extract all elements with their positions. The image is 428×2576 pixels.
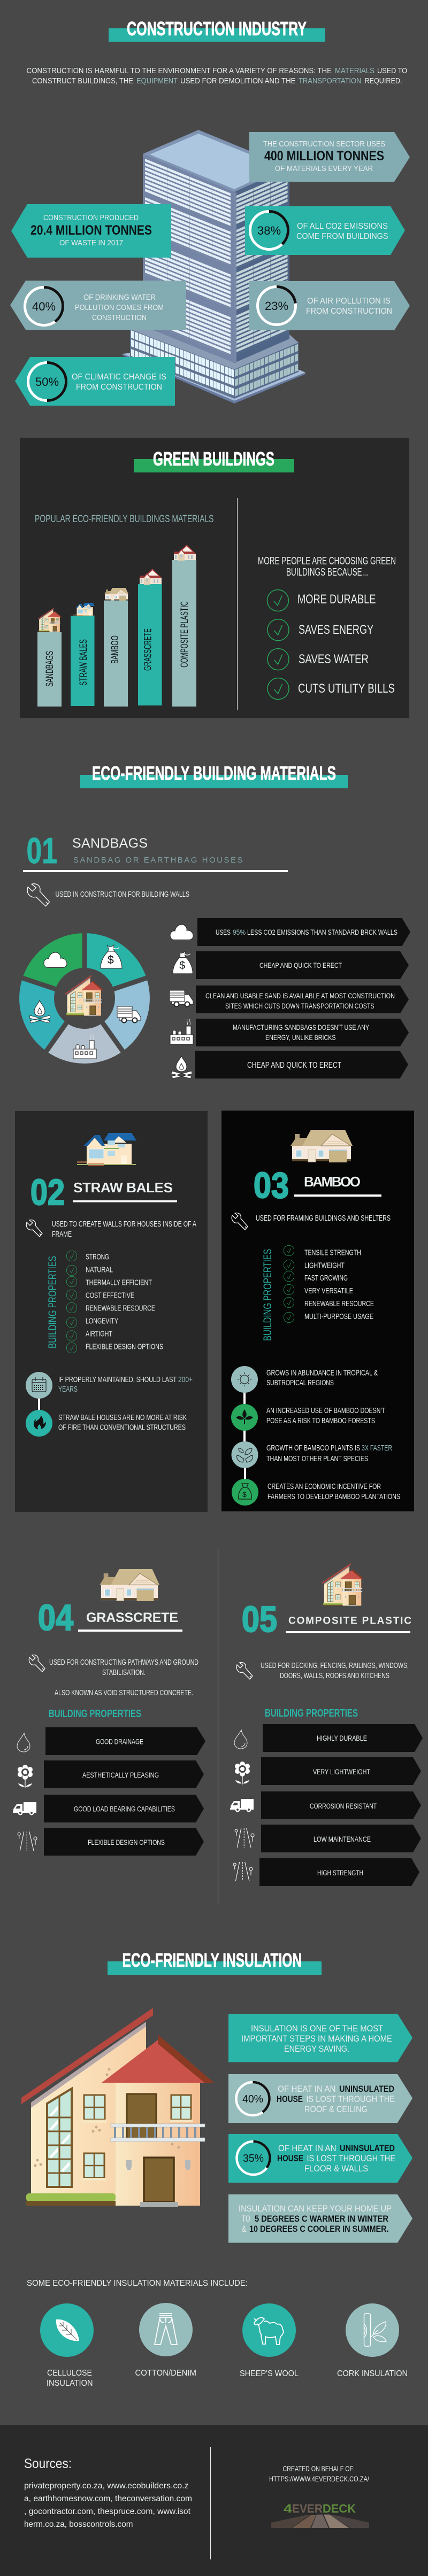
heading: sandbags: SANDBAGS: [72, 836, 148, 851]
footer panel: [0, 2425, 428, 2576]
heading: bamboo: BAMBOO: [304, 1174, 361, 1190]
intro text block: REQUIRED.: [365, 76, 402, 86]
checklist: straw bale properties: STRONG: [86, 1253, 109, 1262]
intro text block: [27, 66, 407, 86]
callout: temperature: &: [242, 2224, 247, 2234]
section 05: composite plastic: [230, 1563, 423, 1886]
bar chart: popular materials: STRAW BALES: [78, 639, 89, 686]
heading: sources: Sources:: [24, 2456, 72, 2471]
callout: temperature: 5 DEGREES C WARMER IN WINTER: [255, 2214, 388, 2224]
callout: 400 million tonnes: 400 MILLION TONNES: [264, 149, 384, 164]
fact: tropical: SUBTROPICAL REGIONS: [266, 1378, 334, 1387]
checklist: bamboo properties: VERY VERSATILE: [304, 1286, 353, 1295]
text: created on behalf of: HTTPS://WWW.4EVERDECK.CO.ZA/: [269, 2474, 369, 2483]
usage text: USED IN CONSTRUCTION FOR BUILDING WALLS: [56, 890, 189, 899]
icon: money bag: [232, 1479, 258, 1506]
intro text block: USED FOR DEMOLITION AND THE: [180, 76, 295, 86]
subheading: SANDBAG OR EARTHBAG HOUSES: [73, 856, 243, 865]
callout: 23% air pollution: OF AIR POLLUTION IS: [307, 297, 391, 306]
underline: [286, 1631, 410, 1633]
house illustration: beige: [100, 1569, 159, 1601]
fact: cheap: [196, 951, 409, 979]
icon: road: [235, 1828, 254, 1848]
title: construction industry: [109, 18, 325, 42]
callout: 23% air pollution: FROM CONSTRUCTION: [306, 307, 392, 316]
label: building properties: BUILDING PROPERTIES: [262, 1249, 274, 1341]
icon: drop: [17, 1733, 30, 1752]
property: high strength: HIGH STRENGTH: [317, 1868, 363, 1877]
fact: lifespan: YEARS: [58, 1385, 78, 1394]
label: building properties: BUILDING PROPERTIES: [47, 1256, 59, 1348]
intro text block: MATERIALS: [335, 66, 374, 75]
number 02: 02: [30, 1172, 65, 1213]
chart heading: POPULAR ECO-FRIENDLY BUILDINGS MATERIALS: [35, 514, 214, 525]
house illustration: beige: [291, 1130, 353, 1162]
text: source list: , gocontractor.com, thespruce.com, www.isot: [24, 2507, 191, 2516]
footer divider: [210, 2447, 211, 2559]
fact: quick to erect: CHEAP AND QUICK TO ERECT: [247, 1061, 341, 1070]
callout: 35% floor and walls: [228, 2134, 412, 2183]
fact: growth: GROWTH OF BAMBOO PLANTS IS: [266, 1444, 360, 1453]
property: corrosion resistant: CORROSION RESISTANT: [310, 1802, 377, 1810]
bar chart: popular materials: BAMBOO: [110, 635, 121, 664]
callout: 40% roof and ceiling: OF HEAT IN AN: [278, 2084, 336, 2094]
checklist: bamboo properties: RENEWABLE RESOURCE: [304, 1299, 374, 1308]
bar chart: popular materials: SANDBAGS: [44, 651, 56, 687]
callout: 400 million tonnes: OF MATERIALS EVERY YEAR: [275, 164, 373, 173]
usage text: [261, 1661, 409, 1680]
callout: 35% floor and walls: IS LOST THROUGH THE: [307, 2153, 395, 2163]
fact: quick to erect: [195, 1051, 408, 1078]
fact: transport: [196, 986, 409, 1013]
house illustration: blue roof: [77, 1133, 136, 1166]
panel: straw bales: [15, 1111, 208, 1512]
callout: temperature: [228, 2194, 412, 2243]
usage text: USED FOR CONSTRUCTING PATHWAYS AND GROUND: [49, 1658, 198, 1667]
fact: economic: CREATES AN ECONOMIC INCENTIVE FOR: [268, 1482, 381, 1491]
icon: road: [18, 1832, 37, 1851]
callout: insulation importance: ENERGY SAVING.: [284, 2044, 349, 2054]
fact: emissions: USES: [216, 928, 231, 936]
fact: energy: [196, 1019, 409, 1046]
property: flexible design: FLEXIBLE DESIGN OPTIONS: [88, 1838, 165, 1846]
callout: 50% climatic change: OF CLIMATIC CHANGE IS: [72, 373, 166, 382]
fact: growth: 3X FASTER: [362, 1444, 392, 1453]
heading: eco-friendly building materials: [80, 762, 348, 788]
underline: [23, 870, 288, 872]
icon: calendar: [26, 1372, 52, 1399]
icon: drop: [234, 1730, 247, 1749]
callout: 40% roof and ceiling: HOUSE: [277, 2094, 303, 2104]
material: cellulose: INSULATION: [47, 2379, 93, 2388]
icon: sun: [231, 1366, 258, 1393]
intro text block: USED TO: [377, 66, 407, 75]
callout: 40% roof and ceiling: [228, 2074, 412, 2123]
icon: wrench: [29, 1655, 45, 1672]
material: cotton denim: [135, 2303, 196, 2378]
text: why green buildings: [258, 555, 396, 578]
icon: factory: [170, 1019, 193, 1044]
callout: 38% CO2 emissions: 38%: [257, 224, 281, 237]
callout: 50% climatic change: [15, 357, 175, 406]
callout: 35% floor and walls: OF HEAT IN AN: [278, 2143, 336, 2153]
property: low maintenance: [261, 1825, 421, 1852]
callout: 40% roof and ceiling: UNINSULATED: [339, 2084, 394, 2094]
heading: green buildings: GREEN BUILDINGS: [153, 448, 274, 470]
usage text: ALSO KNOWN AS VOID STRUCTURED CONCRETE.: [55, 1688, 193, 1697]
callout: 23% air pollution: [249, 281, 410, 330]
callout: 38% CO2 emissions: OF ALL CO2 EMISSIONS: [297, 222, 388, 231]
fact: tropical: [266, 1368, 378, 1387]
callout: 38% CO2 emissions: [245, 206, 405, 255]
icon: truck: [13, 1802, 36, 1815]
number 01: 01: [27, 831, 57, 871]
illustration: office tower: [123, 130, 305, 404]
callout: 40% roof and ceiling: 40%: [242, 2093, 263, 2105]
text: materials intro: SOME ECO-FRIENDLY INSULATION MATERIALS INCLUDE:: [27, 2279, 248, 2288]
text: source list: a, earthhomesnow.com, theconversation.com: [24, 2494, 192, 2503]
logo: 4everdeck: [271, 2502, 369, 2528]
callout: 35% floor and walls: FLOOR & WALLS: [304, 2163, 368, 2174]
icon: flower: [18, 1765, 33, 1788]
fact: tropical: GROWS IN ABUNDANCE IN TROPICAL &: [266, 1368, 378, 1378]
logo: 4everdeck: EVER: [292, 2502, 323, 2515]
property: flexible design: [44, 1828, 204, 1856]
checklist: benefits: MORE DURABLE: [297, 592, 376, 607]
intro text block: TRANSPORTATION: [299, 76, 362, 86]
callout: 50% climatic change: FROM CONSTRUCTION: [76, 383, 162, 392]
property: highly durable: [263, 1724, 423, 1752]
property: low maintenance: LOW MAINTENANCE: [314, 1835, 371, 1843]
material: cork: [337, 2303, 408, 2378]
icon: flower: [235, 1762, 250, 1784]
wheel diagram: [19, 930, 150, 1064]
callout: 40% roof and ceiling: IS LOST THROUGH THE: [306, 2094, 395, 2104]
material: cork: CORK INSULATION: [337, 2369, 408, 2378]
usage text: [52, 1220, 196, 1239]
icon: flame: [26, 1410, 52, 1437]
text: created on behalf of: [269, 2464, 369, 2483]
fact: emissions: [197, 918, 410, 946]
heading: green buildings: [134, 448, 294, 472]
text: source list: herm.co.za, bosscontrols.com: [24, 2520, 133, 2529]
icon: campfire: [171, 1056, 192, 1078]
number 03: 03: [254, 1165, 289, 1206]
number 05: 05: [242, 1599, 277, 1640]
fact: lifespan: [58, 1375, 193, 1394]
checklist: straw bale properties: [66, 1251, 163, 1353]
checklist: bamboo properties: TENSILE STRENGTH: [304, 1248, 361, 1257]
callout: 35% floor and walls: HOUSE: [277, 2153, 303, 2163]
text: source list: privateproperty.co.za, www.ecobuilders.co.z: [24, 2481, 188, 2490]
fact: energy: ENERGY, UNLIKE BRICKS: [265, 1033, 336, 1042]
fact: lifespan: IF PROPERLY MAINTAINED, SHOULD LAST: [58, 1375, 177, 1384]
icon: truck: [230, 1799, 254, 1812]
property: load bearing: [44, 1795, 204, 1822]
callout: 20.4 million tonnes: 20.4 MILLION TONNES: [30, 223, 152, 238]
checklist: straw bale properties: LONGEVITY: [86, 1317, 118, 1325]
logo: 4everdeck: DECK: [323, 2502, 356, 2515]
checklist: straw bale properties: FLEXIBLE DESIGN OPTIONS: [86, 1343, 163, 1351]
callout: 400 million tonnes: THE CONSTRUCTION SECTOR USES: [263, 139, 385, 149]
material: sheep's wool: SHEEP'S WOOL: [240, 2369, 299, 2378]
underline: [294, 1194, 381, 1197]
material: cotton denim: COTTON/DENIM: [135, 2369, 196, 2378]
callout: 23% air pollution: 23%: [265, 299, 288, 313]
number 04: 04: [38, 1597, 73, 1638]
title: construction industry: CONSTRUCTION INDUSTRY: [127, 18, 307, 40]
heading: building properties: BUILDING PROPERTIES: [49, 1708, 141, 1720]
panel: bamboo: [221, 1111, 414, 1511]
callout: 40% drinking water pollution: CONSTRUCTION: [92, 313, 147, 322]
panel divider: [237, 498, 238, 710]
callout: 35% floor and walls: 35%: [243, 2153, 264, 2164]
property: corrosion resistant: [261, 1791, 421, 1819]
callout: 20.4 million tonnes: [11, 204, 171, 258]
callout: temperature: 10 DEGREES C COOLER IN SUMMER.: [249, 2224, 388, 2234]
callout: 35% floor and walls: UNINSULATED: [340, 2143, 395, 2153]
callout: 38% CO2 emissions: COME FROM BUILDINGS: [296, 232, 388, 241]
icon: wrench: [232, 1213, 248, 1230]
fact: forests: POSE AS A RISK TO BAMBOO FORESTS: [266, 1416, 375, 1425]
illustration: large house: [21, 2008, 214, 2207]
usage text: STABILISATION.: [102, 1668, 146, 1677]
fact: fire risk: STRAW BALE HOUSES ARE NO MORE AT RISK: [58, 1413, 187, 1422]
property: highly durable: HIGHLY DURABLE: [317, 1734, 367, 1742]
icon: money bag: [173, 951, 193, 974]
fact: fire risk: OF FIRE THAN CONVENTIONAL STRUCTURES: [58, 1423, 186, 1432]
section 01: sandbags: [19, 831, 410, 1078]
callout: 40% drinking water pollution: POLLUTION COMES FROM: [75, 303, 164, 312]
callout: temperature: INSULATION CAN KEEP YOUR HOME UP: [239, 2203, 392, 2214]
checklist: straw bale properties: NATURAL: [86, 1266, 113, 1275]
fact: economic: [268, 1482, 400, 1501]
house illustration: peach: [322, 1563, 364, 1606]
callout: 20.4 million tonnes: OF WASTE IN 2017: [59, 238, 123, 247]
callout: 40% drinking water pollution: 40%: [32, 300, 56, 313]
heading: building properties: BUILDING PROPERTIES: [265, 1708, 358, 1719]
heading: straw bales: STRAW BALES: [73, 1180, 173, 1196]
checklist: benefits: SAVES ENERGY: [299, 623, 373, 637]
icon: hands and leaf: [231, 1441, 258, 1468]
property: good drainage: GOOD DRAINAGE: [96, 1737, 143, 1746]
intro text block: CONSTRUCT BUILDINGS, THE: [32, 76, 133, 86]
callout: 40% drinking water pollution: OF DRINKING WATER: [83, 293, 156, 302]
heading: grasscrete: GRASSCRETE: [86, 1610, 178, 1625]
fact: energy: MANUFACTURING SANDBAGS DOESN'T USE ANY: [233, 1023, 370, 1031]
property: high strength: [259, 1858, 419, 1886]
property: aesthetically pleasing: AESTHETICALLY PLEASING: [82, 1771, 159, 1779]
icon: road: [233, 1862, 253, 1881]
text: source list: [24, 2481, 192, 2529]
checklist: straw bale properties: AIRTIGHT: [86, 1330, 112, 1338]
checklist: straw bale properties: THERMALLY EFFICIENT: [86, 1278, 152, 1287]
heading: eco-friendly insulation: [108, 1949, 322, 1975]
callout: insulation importance: [228, 2014, 412, 2062]
material: sheep's wool: [240, 2303, 299, 2378]
property: aesthetically pleasing: [44, 1760, 204, 1788]
bar chart: popular materials: GRASSCRETE: [142, 629, 154, 671]
checklist: benefits: CUTS UTILITY BILLS: [298, 681, 395, 696]
callout: 400 million tonnes: [249, 132, 410, 182]
intro text block: EQUIPMENT: [136, 76, 178, 86]
bar chart: popular materials: COMPOSITE PLASTIC: [179, 601, 190, 668]
callout: insulation importance: INSULATION IS ONE OF THE MOST: [251, 2023, 383, 2034]
checklist: straw bale properties: COST EFFECTIVE: [86, 1291, 134, 1300]
fact: forests: [266, 1406, 385, 1425]
callout: 40% roof and ceiling: ROOF & CEILING: [304, 2104, 368, 2114]
fact: fire risk: [58, 1413, 187, 1432]
fact: emissions: 95%: [233, 928, 246, 936]
callout: 40% drinking water pollution: [10, 281, 186, 330]
checklist: bamboo properties: MULTI-PURPOSE USAGE: [304, 1312, 373, 1321]
heading: eco-friendly insulation: ECO-FRIENDLY INSULATION: [122, 1949, 302, 1971]
callout: 20.4 million tonnes: CONSTRUCTION PRODUCED: [43, 213, 139, 222]
callout: temperature: TO: [242, 2214, 250, 2224]
icon: money bag: $: [242, 1490, 247, 1499]
text: why green buildings: BUILDINGS BECAUSE...: [286, 567, 368, 578]
bar chart: popular materials: [37, 545, 196, 707]
checklist: benefits: SAVES WATER: [299, 652, 369, 666]
icon: wrench: [26, 1220, 42, 1237]
fact: transport: SITES WHICH CUTS DOWN TRANSPORTATION COSTS: [225, 1002, 374, 1010]
section 04: grasscrete: [13, 1569, 205, 1856]
usage text: [49, 1658, 198, 1697]
icon: plant: [231, 1404, 258, 1431]
timeline connector: [38, 1398, 40, 1410]
callout: 50% climatic change: 50%: [35, 375, 59, 389]
logo: 4everdeck: 4: [284, 2502, 293, 2515]
fact: lifespan: 200+: [178, 1375, 193, 1384]
property: very lightweight: [261, 1757, 421, 1785]
checklist: benefits: [267, 590, 395, 700]
icon: truck: [170, 990, 193, 1007]
icon: cloud: [170, 925, 193, 940]
icon: wrench: [236, 1663, 253, 1679]
checklist: straw bale properties: RENEWABLE RESOURCE: [86, 1304, 155, 1313]
underline: [73, 1200, 177, 1202]
heading: composite plastic: COMPOSITE PLASTIC: [288, 1615, 411, 1627]
panel: green buildings: [20, 438, 409, 718]
text: created on behalf of: CREATED ON BEHALF OF:: [282, 2464, 355, 2473]
property: good drainage: [45, 1727, 205, 1755]
checklist: bamboo properties: [284, 1245, 374, 1323]
fact: cheap: CHEAP AND QUICK TO ERECT: [259, 961, 342, 969]
intro text block: CONSTRUCTION IS HARMFUL TO THE ENVIRONMENT FOR A VARIETY OF REASONS: THE: [27, 66, 332, 75]
underline: [78, 1630, 182, 1632]
fact: growth: [266, 1444, 392, 1463]
icon: wrench: [27, 884, 49, 906]
material: cellulose: [40, 2303, 94, 2388]
checklist: bamboo properties: LIGHTWEIGHT: [304, 1261, 345, 1270]
usage text: USED TO CREATE WALLS FOR HOUSES INSIDE OF A: [52, 1220, 196, 1229]
usage text: FRAME: [52, 1230, 72, 1239]
property: very lightweight: VERY LIGHTWEIGHT: [313, 1767, 370, 1776]
fact: growth: THAN MOST OTHER PLANT SPECIES: [266, 1454, 368, 1463]
property: load bearing: GOOD LOAD BEARING CAPABILITIES: [74, 1804, 175, 1813]
checklist: bamboo properties: FAST GROWING: [304, 1274, 348, 1283]
material: cellulose: CELLULOSE: [47, 2369, 92, 2378]
timeline connectors: [244, 1392, 245, 1479]
callout: insulation importance: IMPORTANT STEPS IN MAKING A HOME: [241, 2034, 392, 2044]
